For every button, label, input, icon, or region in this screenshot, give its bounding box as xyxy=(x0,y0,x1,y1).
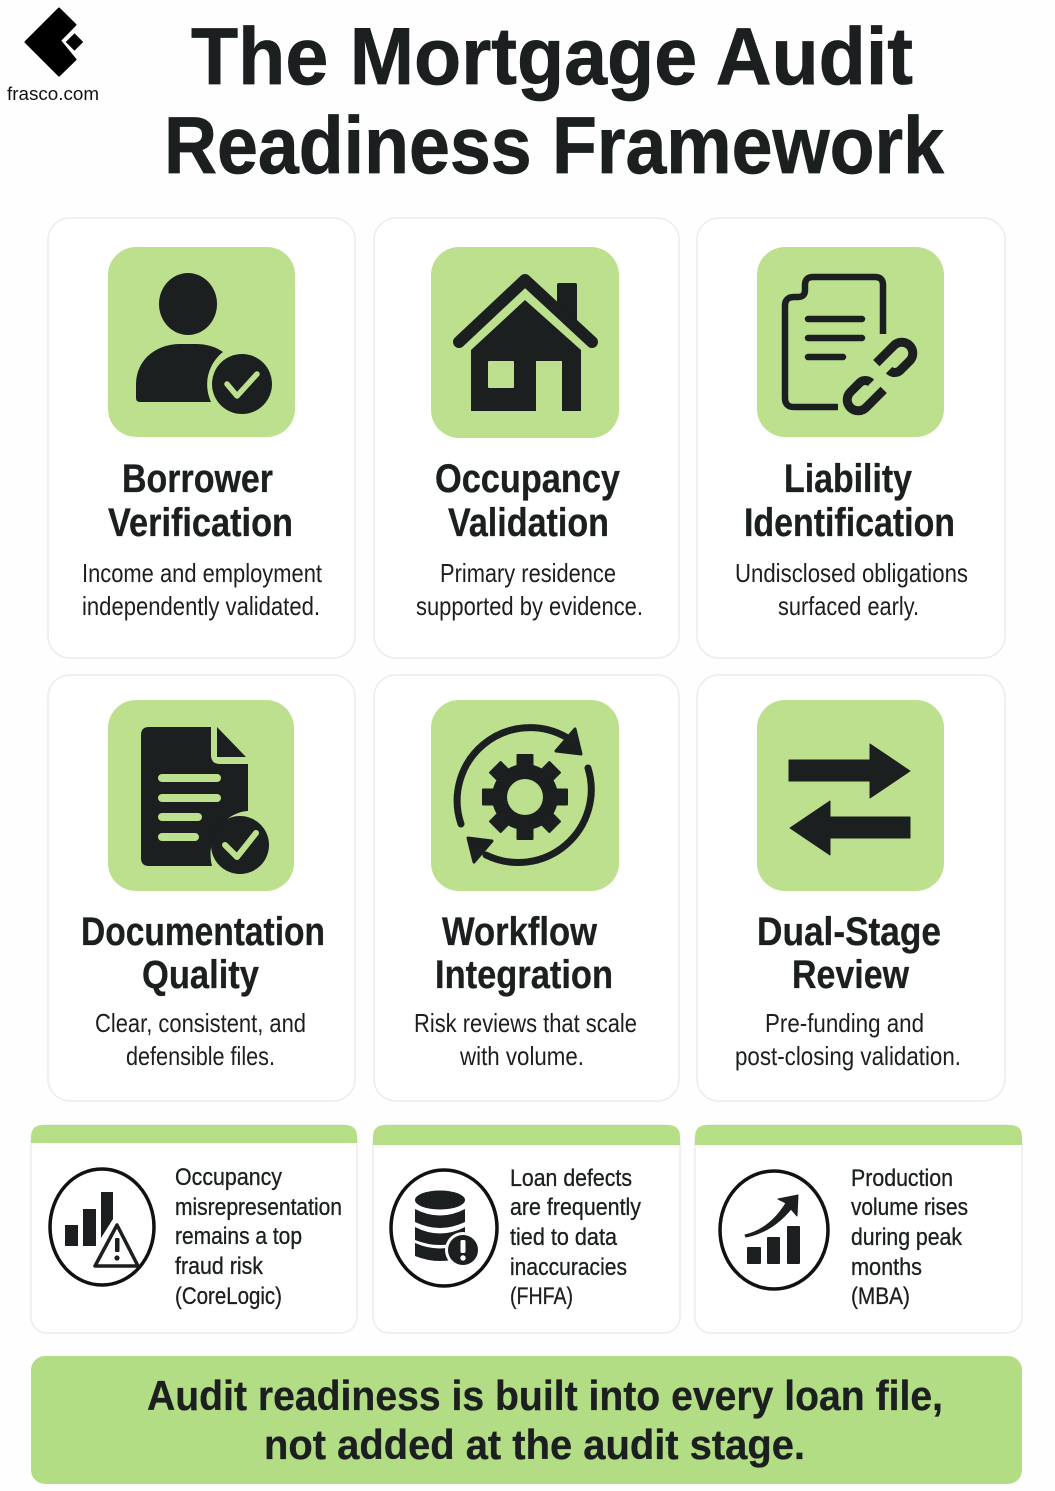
heading: Borrower xyxy=(122,457,273,501)
heading xyxy=(435,457,621,545)
text block: with volume. xyxy=(459,1041,584,1071)
text block: independently validated. xyxy=(82,591,320,621)
panel: borrower verification xyxy=(48,218,355,658)
text block: Clear, consistent, and xyxy=(95,1008,306,1038)
text block xyxy=(95,1008,306,1071)
text block: inaccuracies xyxy=(510,1254,627,1281)
panel: liability identification xyxy=(697,218,1005,658)
heading: Identification xyxy=(744,501,955,545)
heading: Review xyxy=(792,953,910,997)
heading: Quality xyxy=(142,953,260,997)
heading: Dual-Stage xyxy=(757,910,941,954)
panel: documentation quality xyxy=(48,675,355,1101)
text block xyxy=(851,1165,968,1310)
logo: frasco xyxy=(7,8,99,104)
callout: closing banner: not added at the audit stage. xyxy=(264,1421,805,1468)
text block: tied to data xyxy=(510,1224,618,1251)
text block: Risk reviews that scale xyxy=(414,1008,637,1038)
text block xyxy=(735,1008,961,1071)
text block: are frequently xyxy=(510,1194,641,1221)
callout: closing banner: Audit readiness is built into every loan file, xyxy=(147,1372,943,1419)
text block: remains a top xyxy=(175,1223,302,1250)
title: Readiness Framework xyxy=(164,101,945,191)
text block: Income and employment xyxy=(82,558,323,588)
text block: Primary residence xyxy=(440,558,616,588)
text block: Loan defects xyxy=(510,1165,632,1192)
text block: post-closing validation. xyxy=(735,1041,961,1071)
heading xyxy=(435,910,613,997)
text block: months xyxy=(851,1254,922,1281)
icon: house xyxy=(431,247,619,438)
text block: (FHFA) xyxy=(510,1283,573,1310)
panel: occupancy validation xyxy=(374,218,679,658)
icon: document with check xyxy=(108,700,294,891)
panel: dual-stage review xyxy=(697,675,1005,1101)
text block: volume rises xyxy=(851,1194,968,1221)
heading: Integration xyxy=(435,953,613,997)
panel: loan defects stat xyxy=(373,1125,680,1333)
panel: workflow integration xyxy=(374,675,679,1101)
heading: Workflow xyxy=(442,910,598,954)
text block: defensible files. xyxy=(126,1041,275,1071)
text block xyxy=(82,558,323,621)
icon: database with alert xyxy=(391,1170,497,1286)
panel: production volume stat xyxy=(695,1125,1022,1333)
title: The Mortgage Audit xyxy=(191,12,913,102)
text block xyxy=(735,558,968,621)
title xyxy=(164,12,945,191)
heading: Verification xyxy=(108,501,293,545)
icon: person with check xyxy=(108,247,295,437)
icon: rising bars with arrow xyxy=(720,1171,828,1289)
text block xyxy=(175,1164,342,1310)
text block: supported by evidence. xyxy=(416,591,643,621)
text block: during peak xyxy=(851,1224,963,1251)
icon: gear with cycle arrows xyxy=(431,700,619,891)
text block: fraud risk xyxy=(175,1253,264,1280)
text block: Pre-funding and xyxy=(765,1008,924,1038)
heading: Liability xyxy=(784,457,913,501)
heading xyxy=(757,910,941,997)
heading xyxy=(744,457,955,545)
text block xyxy=(416,558,643,621)
heading: Validation xyxy=(448,501,609,545)
text block: Undisclosed obligations xyxy=(735,558,968,588)
text block: Production xyxy=(851,1165,953,1192)
text block: Occupancy xyxy=(175,1164,282,1191)
heading: Documentation xyxy=(81,910,325,954)
text block xyxy=(510,1165,641,1310)
heading: Occupancy xyxy=(435,457,621,501)
text block: surfaced early. xyxy=(778,591,919,621)
icon: bar chart with warning xyxy=(50,1169,154,1285)
text block xyxy=(414,1008,637,1071)
logo: frasco: frasco.com xyxy=(7,84,99,104)
callout: closing banner xyxy=(31,1356,1022,1484)
text block: misrepresentation xyxy=(175,1194,342,1221)
text block: (MBA) xyxy=(851,1283,910,1310)
icon: document with link xyxy=(757,247,944,437)
heading xyxy=(81,910,325,997)
panel: occupancy stat xyxy=(31,1125,357,1333)
text block: (CoreLogic) xyxy=(175,1283,282,1310)
icon: opposing arrows xyxy=(757,700,944,891)
heading xyxy=(108,457,293,545)
